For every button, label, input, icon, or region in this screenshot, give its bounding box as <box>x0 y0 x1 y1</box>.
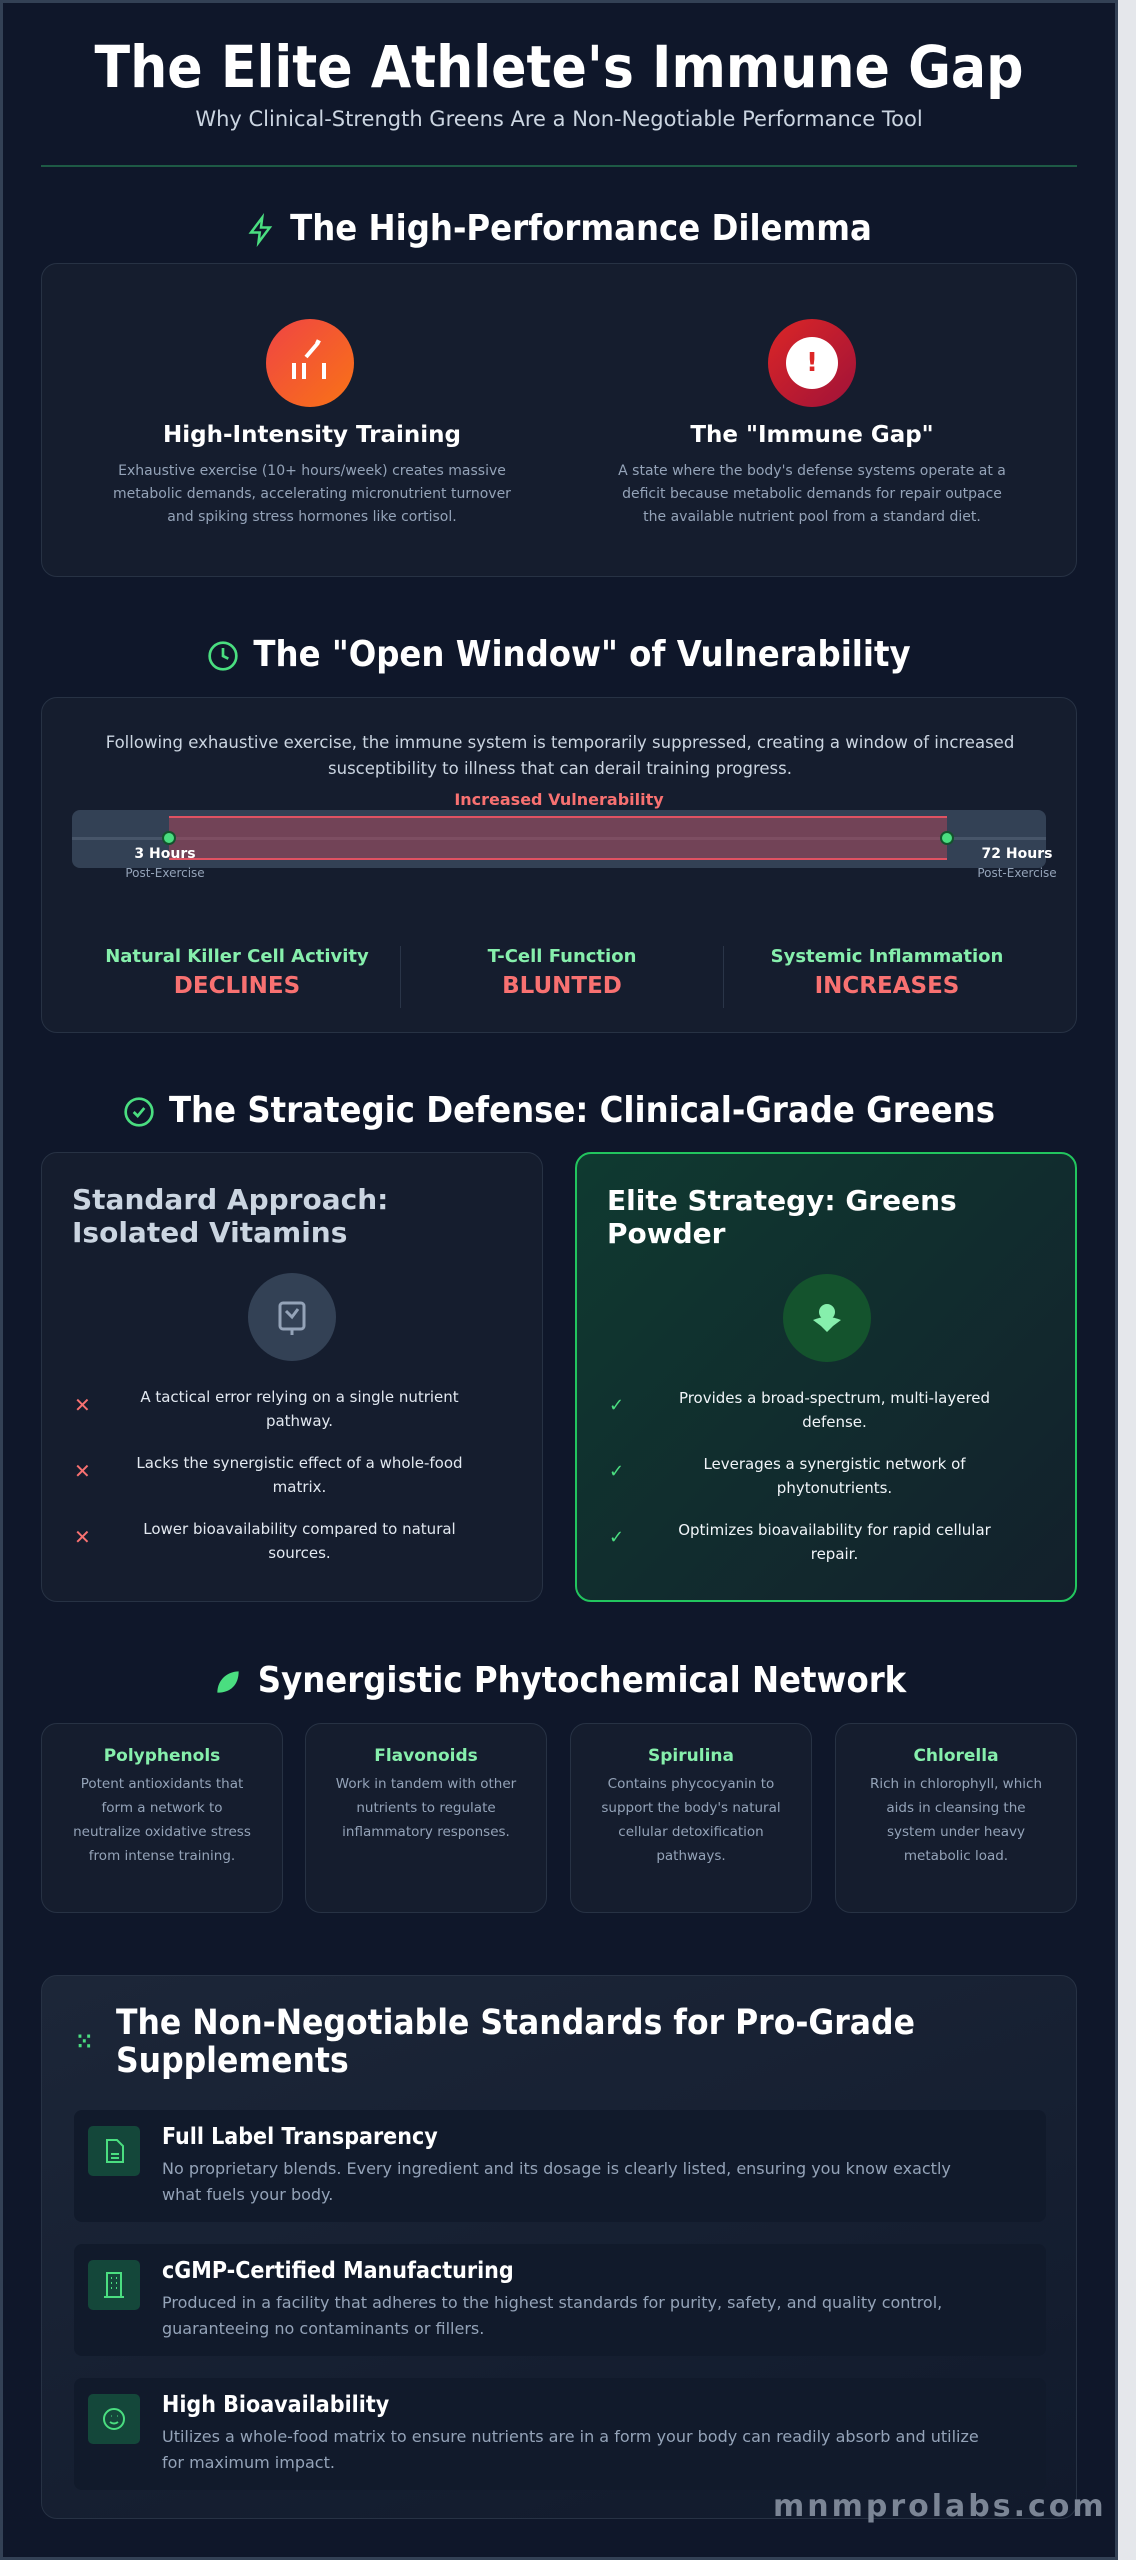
list: pros: ✓ <box>609 1527 624 1548</box>
icon: pill <box>248 1273 336 1361</box>
stat: NK cells: DECLINES <box>174 973 300 999</box>
timeline chart: Increased Vulnerability <box>454 790 664 809</box>
icon: gap: ! <box>806 348 818 378</box>
intro text: Following exhaustive exercise, the immune system is temporarily suppressed, creating a window of increased susceptibility to illness that can derail training progress. <box>106 733 1014 778</box>
list: pros: Optimizes bioavailability for rapid cellular <box>678 1521 991 1539</box>
list: cons: A tactical error relying on a single nutrient pathway. <box>140 1388 459 1430</box>
item: transparency: No proprietary blends. Every ingredient and its dosage is clearly listed, ensuring you know exactly what fuels your body. <box>162 2159 951 2204</box>
card: flavonoids <box>305 1723 547 1913</box>
icon: gap <box>768 319 856 407</box>
heading: defense: The Strategic Defense: Clinical-Grade Greens <box>169 1090 995 1131</box>
card: polyphenols <box>41 1723 283 1913</box>
card: standard approach <box>41 1152 543 1602</box>
card: flavonoids: Work in tandem with other nutrients to regulate inflammatory responses. <box>336 1776 516 1840</box>
list: pros: ✓ <box>609 1461 624 1482</box>
text: gap: A state where the body's defense systems operate at a deficit because metabolic demands for repair outpace the available nutrient pool from a standard diet. <box>618 463 1006 525</box>
card: spirulina <box>570 1723 812 1913</box>
heading: standards: ⁙ <box>76 2030 93 2055</box>
stat: T-cell <box>488 946 636 999</box>
card: chlorella: Chlorella <box>913 1746 999 1766</box>
stat: T-cell: BLUNTED <box>502 973 622 999</box>
card: standard approach: Standard Approach: Isolated Vitamins <box>72 1183 388 1249</box>
card: polyphenols: Polyphenols <box>104 1746 220 1766</box>
list: pros: Leverages a synergistic network of phytonutrients. <box>703 1455 966 1497</box>
item: bioavailability: Utilizes a whole-food matrix to ensure nutrients are in a form your body can readily absorb and utilize for maximum impact. <box>162 2427 979 2472</box>
list: cons: ✕ <box>74 1459 91 1483</box>
list: cons: ✕ <box>74 1525 91 1549</box>
card: chlorella <box>835 1723 1077 1913</box>
item: bioavailability: High Bioavailability <box>162 2392 389 2418</box>
subtitle: Why Clinical-Strength Greens Are a Non-Negotiable Performance Tool <box>195 107 923 131</box>
heading: window: The "Open Window" of Vulnerability <box>253 634 911 675</box>
item: cGMP: cGMP-Certified Manufacturing <box>162 2258 514 2284</box>
stat: inflammation: INCREASES <box>815 973 959 999</box>
timeline chart: 72 Hours <box>982 846 1052 862</box>
card: flavonoids: Flavonoids <box>374 1746 478 1766</box>
heading: dilemma: The High-Performance Dilemma <box>290 208 872 249</box>
stat: inflammation: Systemic Inflammation <box>771 946 1003 967</box>
list: pros <box>609 1389 991 1563</box>
card: spirulina: Spirulina <box>648 1746 734 1766</box>
stat: NK cells: Natural Killer Cell Activity <box>105 946 369 967</box>
item: cGMP: Produced in a facility that adheres to the highest standards for purity, safety, and quality control, guaranteeing no contaminants or fillers. <box>162 2293 942 2338</box>
list: cons: ✕ <box>74 1393 91 1417</box>
list: cons: Lower bioavailability compared to natural sources. <box>143 1520 456 1562</box>
list: pros: Provides a broad-spectrum, multi-layered defense. <box>679 1389 990 1431</box>
icon: leaf <box>783 1274 871 1362</box>
panel: standards <box>41 1975 1077 2519</box>
timeline chart: Post-Exercise <box>125 866 205 880</box>
item: cGMP <box>74 2244 1046 2356</box>
list: pros: ✓ <box>609 1395 624 1416</box>
title: The Elite Athlete's Immune Gap <box>95 33 1023 101</box>
card: elite strategy <box>575 1152 1077 1602</box>
panel: dilemma <box>41 263 1077 577</box>
stat: inflammation <box>771 946 1003 999</box>
timeline chart: 3 Hours <box>134 846 196 862</box>
timeline chart <box>72 790 1057 880</box>
item: transparency <box>74 2110 1046 2222</box>
stat: T-cell: T-Cell Function <box>488 946 636 967</box>
item: transparency: Full Label Transparency <box>162 2124 438 2150</box>
heading: network: Synergistic Phytochemical Network <box>258 1660 906 1701</box>
card: chlorella: Rich in chlorophyll, which aids in cleansing the system under heavy metabolic load. <box>870 1776 1042 1864</box>
list: cons: Lacks the synergistic effect of a whole-food matrix. <box>136 1454 463 1496</box>
heading: training: High-Intensity Training <box>163 422 461 448</box>
heading: gap: The "Immune Gap" <box>690 422 934 448</box>
watermark: mnmprolabs.com <box>773 2489 1107 2524</box>
stat: NK cells <box>105 946 369 999</box>
card: elite strategy: Elite Strategy: Greens Powder <box>607 1184 957 1250</box>
card: spirulina: Contains phycocyanin to support the body's natural cellular detoxification pathways. <box>601 1776 781 1864</box>
timeline chart: Post-Exercise <box>977 866 1057 880</box>
icon: training <box>266 319 354 407</box>
item: bioavailability <box>74 2378 1046 2490</box>
panel: window <box>41 697 1077 1033</box>
list: cons <box>74 1388 463 1562</box>
list: pros: repair. <box>811 1545 858 1563</box>
card: polyphenols: Potent antioxidants that form a network to neutralize oxidative stress from intense training. <box>73 1776 251 1864</box>
heading: standards: The Non-Negotiable Standards for Pro-Grade Supplements <box>116 2003 915 2081</box>
text: training: Exhaustive exercise (10+ hours/week) creates massive metabolic demands, accelerating micronutrient turnover and spiking stress hormones like cortisol. <box>113 463 511 525</box>
